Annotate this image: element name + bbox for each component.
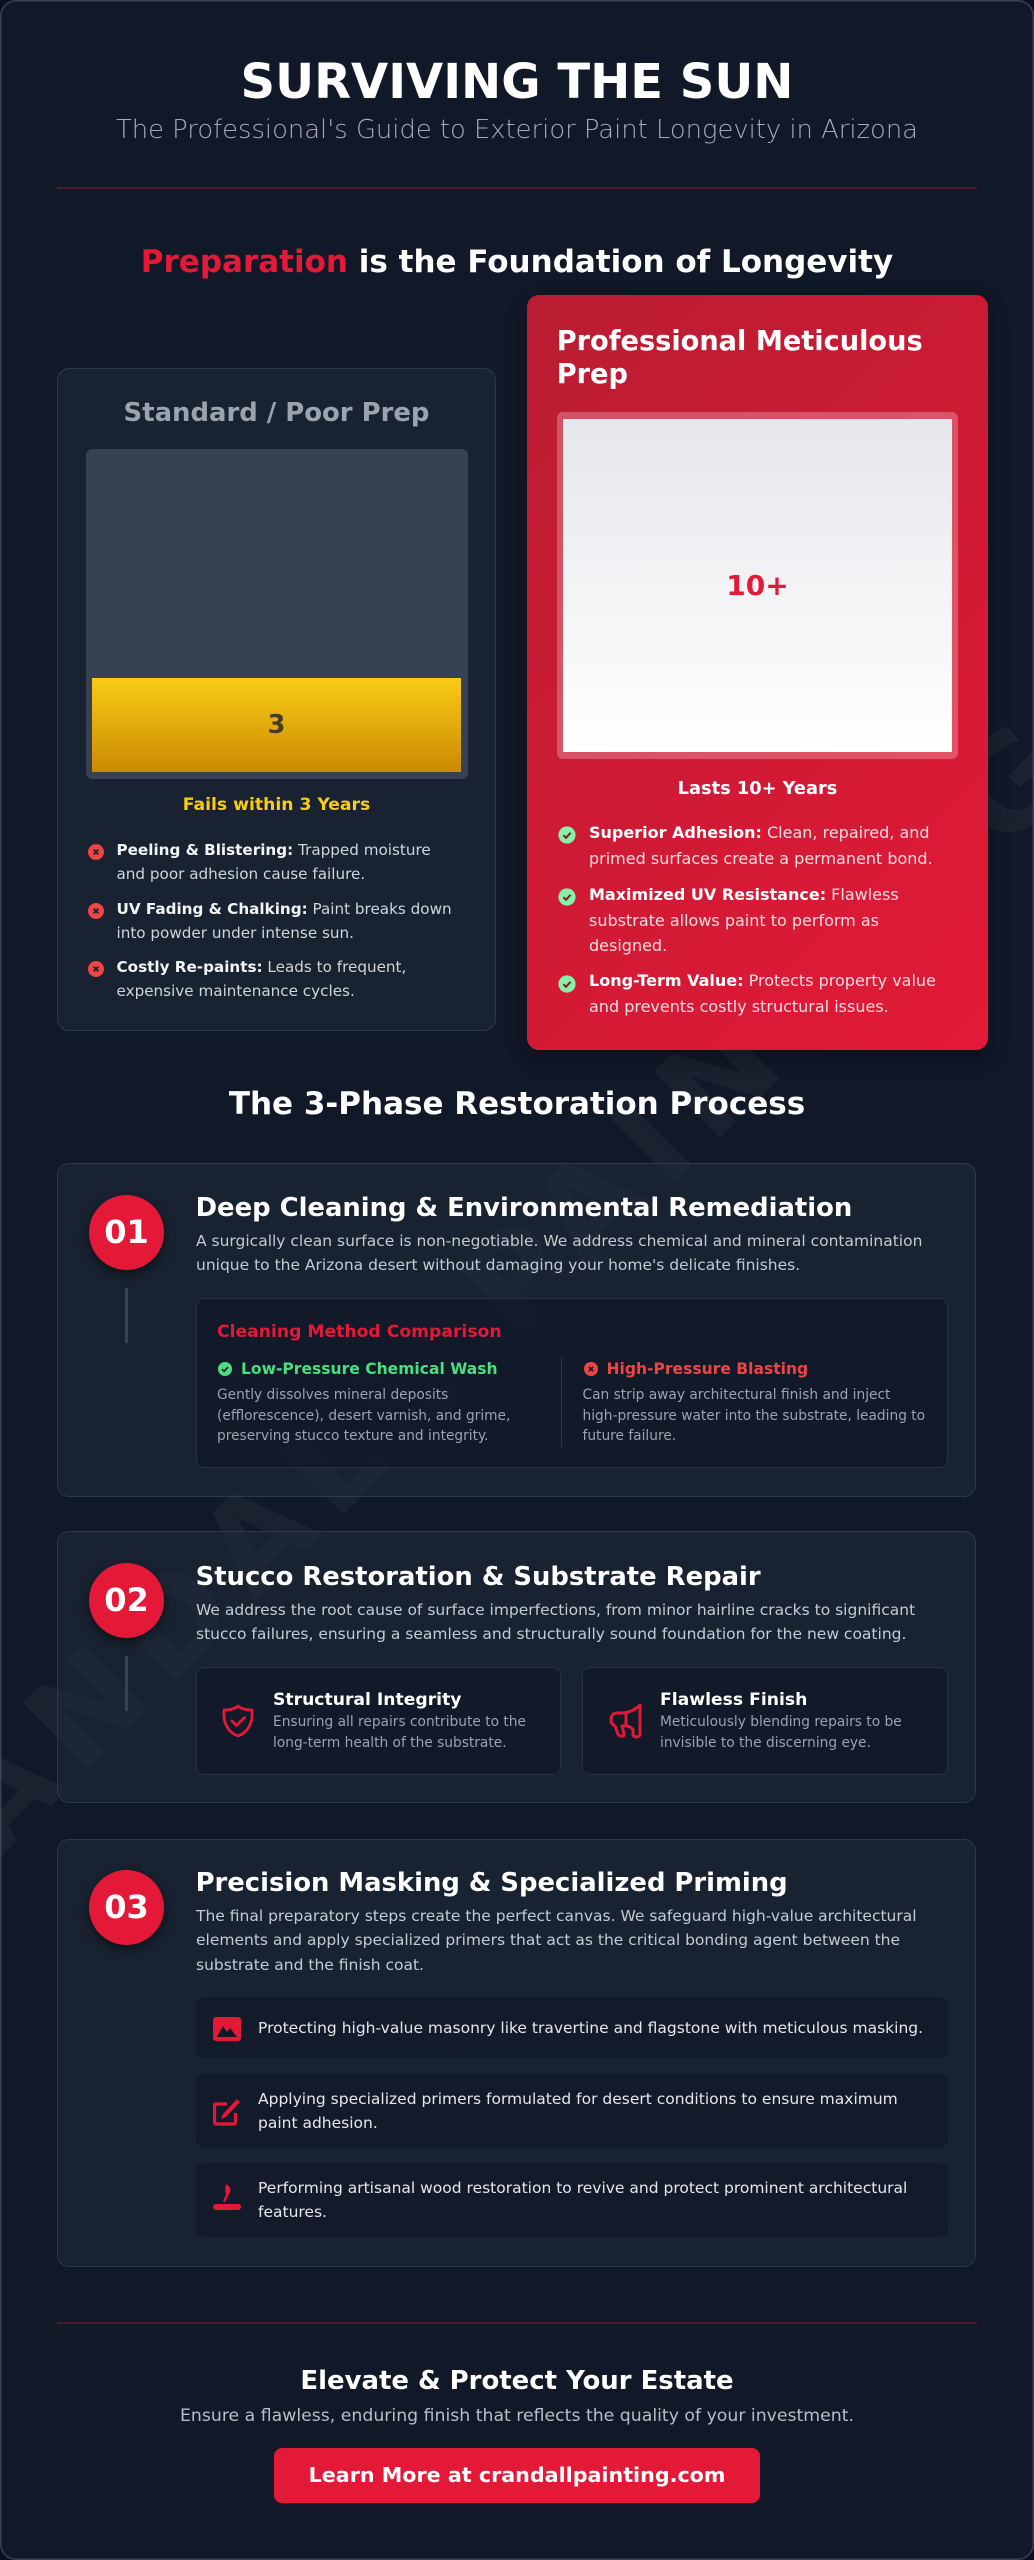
icon: cross bbox=[88, 961, 104, 977]
comparison title: Cleaning Method Comparison bbox=[217, 1322, 502, 1342]
icon: edit bbox=[213, 2099, 240, 2126]
icon: check bbox=[218, 1362, 232, 1376]
low pressure text: Gently dissolves mineral deposits bbox=[217, 1387, 448, 1403]
low pressure text: (efflorescence), desert varnish, and grime, bbox=[217, 1408, 510, 1424]
list item: uv resistance: designed. bbox=[589, 936, 667, 955]
bar label: lasts: Lasts 10+ Years bbox=[678, 778, 837, 798]
primers text: paint adhesion. bbox=[258, 2114, 378, 2132]
bar chart: 3 years bbox=[86, 449, 468, 779]
list item: costly: Costly Re-paints: Leads to frequent, bbox=[116, 958, 406, 976]
wood text: features. bbox=[258, 2203, 327, 2221]
list item: costly bbox=[116, 958, 406, 1000]
list item: value bbox=[589, 971, 936, 1016]
icon: check bbox=[558, 975, 576, 993]
step number 03: 03 bbox=[104, 1888, 149, 1926]
list item: adhesion: primed surfaces create a permanent bond. bbox=[589, 849, 933, 868]
step number 03 bbox=[89, 1870, 164, 1945]
list item: uv resistance: substrate allows paint to perform as bbox=[589, 911, 879, 930]
low pressure text bbox=[217, 1387, 510, 1444]
title: SURVIVING THE SUN bbox=[241, 54, 793, 110]
phase 2 description bbox=[196, 1601, 915, 1643]
structural text bbox=[273, 1714, 526, 1750]
masonry text: Protecting high-value masonry like travertine and flagstone with meticulous masking. bbox=[258, 2019, 923, 2037]
flawless text: Meticulously blending repairs to be bbox=[660, 1714, 902, 1730]
list item: value: and prevents costly structural issues. bbox=[589, 997, 889, 1016]
wood text: Performing artisanal wood restoration to revive and protect prominent architectural bbox=[258, 2179, 907, 2197]
phase 1 title: Deep Cleaning & Environmental Remediation bbox=[196, 1192, 852, 1222]
heading: process: The 3-Phase Restoration Process bbox=[229, 1086, 805, 1122]
icon: image bbox=[213, 2017, 241, 2041]
list item: uv resistance: Maximized UV Resistance: Flawless bbox=[589, 885, 899, 904]
bar chart: 10+ years bbox=[557, 412, 958, 759]
phase 3 description bbox=[196, 1907, 917, 1974]
step number 01: 01 bbox=[104, 1213, 149, 1251]
icon: cross bbox=[88, 903, 104, 919]
sub-panel: structural integrity bbox=[196, 1667, 561, 1775]
high pressure text: Can strip away architectural finish and inject bbox=[582, 1387, 890, 1403]
phase 1 description: unique to the Arizona desert without damaging your home's delicate finishes. bbox=[196, 1256, 800, 1274]
step number 02: 02 bbox=[104, 1581, 149, 1619]
flawless title: Flawless Finish bbox=[660, 1690, 807, 1710]
bar label: fails: Fails within 3 Years bbox=[183, 795, 370, 815]
phase 3 description: The final preparatory steps create the perfect canvas. We safeguard high-value architectural bbox=[196, 1907, 917, 1925]
icon: shield bbox=[222, 1704, 254, 1738]
low pressure heading: Low-Pressure Chemical Wash bbox=[241, 1360, 498, 1378]
panel: phase 2 bbox=[57, 1531, 976, 1803]
high pressure text: high-pressure water into the substrate, leading to bbox=[582, 1408, 925, 1424]
panel heading: professional: Prep bbox=[557, 359, 628, 390]
comparison box bbox=[196, 1298, 948, 1468]
list item: adhesion bbox=[589, 823, 933, 868]
flawless text bbox=[660, 1714, 902, 1750]
phase 3 title: Precision Masking & Specialized Priming bbox=[196, 1868, 788, 1898]
high pressure text: future failure. bbox=[582, 1428, 676, 1444]
phase 3 description: substrate and the finish coat. bbox=[196, 1956, 424, 1974]
high pressure heading: High-Pressure Blasting bbox=[606, 1360, 808, 1378]
high pressure text bbox=[582, 1387, 925, 1444]
list item: peeling: and poor adhesion cause failure. bbox=[116, 865, 365, 883]
panel: professional prep bbox=[527, 295, 988, 1050]
row: primers bbox=[196, 2073, 948, 2148]
phase 2 description: We address the root cause of surface imperfections, from minor hairline cracks to significant bbox=[196, 1601, 915, 1619]
panel: phase 1 bbox=[57, 1163, 976, 1497]
phase 1 description: A surgically clean surface is non-negotiable. We address chemical and mineral contamination bbox=[196, 1232, 922, 1250]
primers text: Applying specialized primers formulated for desert conditions to ensure maximum bbox=[258, 2090, 898, 2108]
structural text: Ensuring all repairs contribute to the bbox=[273, 1714, 526, 1730]
list item: costly: expensive maintenance cycles. bbox=[116, 982, 355, 1000]
list item: value: Long-Term Value: Protects property value bbox=[589, 971, 936, 990]
step number 02 bbox=[89, 1563, 164, 1638]
primers text bbox=[258, 2090, 898, 2132]
row: masonry bbox=[196, 1997, 948, 2058]
bar: 10+ bbox=[563, 419, 952, 752]
icon: cross bbox=[88, 844, 104, 860]
icon: check bbox=[558, 826, 576, 844]
phase 2 title: Stucco Restoration & Substrate Repair bbox=[196, 1562, 761, 1592]
phase 1 description bbox=[196, 1232, 922, 1274]
bar: 3 bbox=[92, 678, 461, 772]
panel heading: standard: Standard / Poor Prep bbox=[124, 398, 429, 428]
step number 01 bbox=[89, 1195, 164, 1270]
button bbox=[274, 2448, 760, 2503]
list item: adhesion: Superior Adhesion: Clean, repaired, and bbox=[589, 823, 930, 842]
list item: peeling: Peeling & Blistering: Trapped moisture bbox=[116, 841, 431, 859]
panel heading: professional bbox=[557, 326, 923, 390]
heading: preparation: Preparation is the Foundation of Longevity bbox=[141, 244, 893, 280]
panel heading: professional: Professional Meticulous bbox=[557, 326, 923, 357]
icon: cross bbox=[584, 1362, 598, 1376]
list item: peeling bbox=[116, 841, 431, 883]
icon: bullhorn bbox=[610, 1704, 642, 1738]
structural title: Structural Integrity bbox=[273, 1690, 462, 1710]
row: wood bbox=[196, 2163, 948, 2237]
panel: phase 3 bbox=[57, 1839, 976, 2267]
list item: uv fading: into powder under intense sun. bbox=[116, 924, 354, 942]
flawless text: invisible to the discerning eye. bbox=[660, 1734, 871, 1750]
footer text: Ensure a flawless, enduring finish that reflects the quality of your investment. bbox=[180, 2406, 854, 2426]
structural text: long-term health of the substrate. bbox=[273, 1734, 507, 1750]
bar: 3: 3 bbox=[268, 710, 285, 740]
footer heading: Elevate & Protect Your Estate bbox=[300, 2366, 734, 2396]
list item: uv resistance bbox=[589, 885, 899, 955]
icon: check bbox=[558, 888, 576, 906]
list item: uv fading: UV Fading & Chalking: Paint breaks down bbox=[116, 900, 452, 918]
icon: stain brush bbox=[213, 2184, 241, 2210]
bar: 10+: 10+ bbox=[726, 569, 789, 602]
wood text bbox=[258, 2179, 907, 2221]
low pressure text: preserving stucco texture and integrity. bbox=[217, 1428, 489, 1444]
panel: standard poor prep bbox=[57, 368, 496, 1031]
sub-panel: flawless finish bbox=[582, 1667, 948, 1775]
subtitle: The Professional's Guide to Exterior Paint Longevity in Arizona bbox=[116, 115, 918, 145]
phase 3 description: elements and apply specialized primers that act as the critical bonding agent between the bbox=[196, 1931, 900, 1949]
list item: uv fading bbox=[116, 900, 452, 942]
phase 2 description: stucco failures, ensuring a seamless and structurally sound foundation for the new coating. bbox=[196, 1625, 906, 1643]
button: Learn More at crandallpainting.com bbox=[309, 2463, 725, 2487]
